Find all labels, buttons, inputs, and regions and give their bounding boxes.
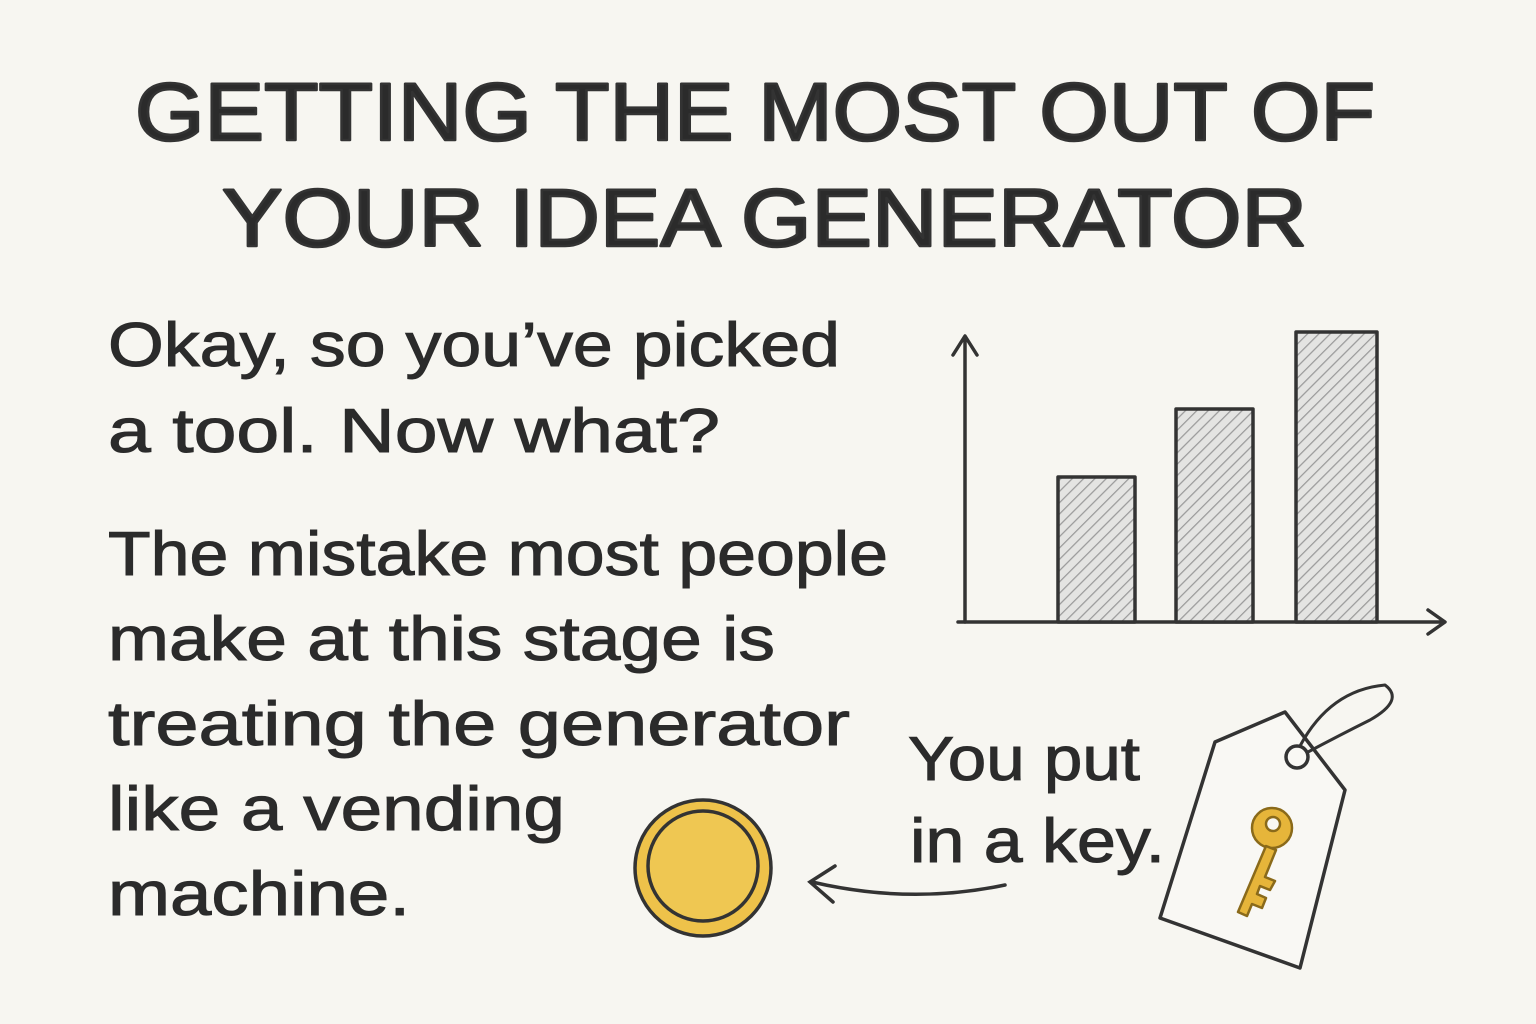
icon: coin	[635, 800, 771, 936]
text block: vending machine mistake: treating the generator	[108, 690, 850, 759]
text block: intro question: Okay, so you’ve picked	[108, 311, 840, 380]
text block: vending machine mistake: machine.	[108, 860, 410, 929]
text block: vending machine mistake: The mistake most people	[108, 520, 888, 589]
title: GETTING THE MOST OUT OF	[135, 67, 1375, 158]
callout text: in a key.	[910, 807, 1165, 876]
text block: intro question: a tool. Now what?	[108, 397, 720, 466]
text block: vending machine mistake	[108, 520, 888, 929]
title	[135, 67, 1375, 264]
icon: tag with key	[1160, 685, 1392, 968]
text block: vending machine mistake: make at this stage is	[108, 605, 775, 674]
arrow	[810, 866, 1005, 902]
callout text	[908, 725, 1165, 876]
bar chart	[953, 332, 1445, 634]
text block: intro question	[108, 311, 840, 466]
title: YOUR IDEA GENERATOR	[222, 173, 1307, 264]
text block: vending machine mistake: like a vending	[108, 775, 565, 844]
callout text: You put	[908, 725, 1140, 794]
